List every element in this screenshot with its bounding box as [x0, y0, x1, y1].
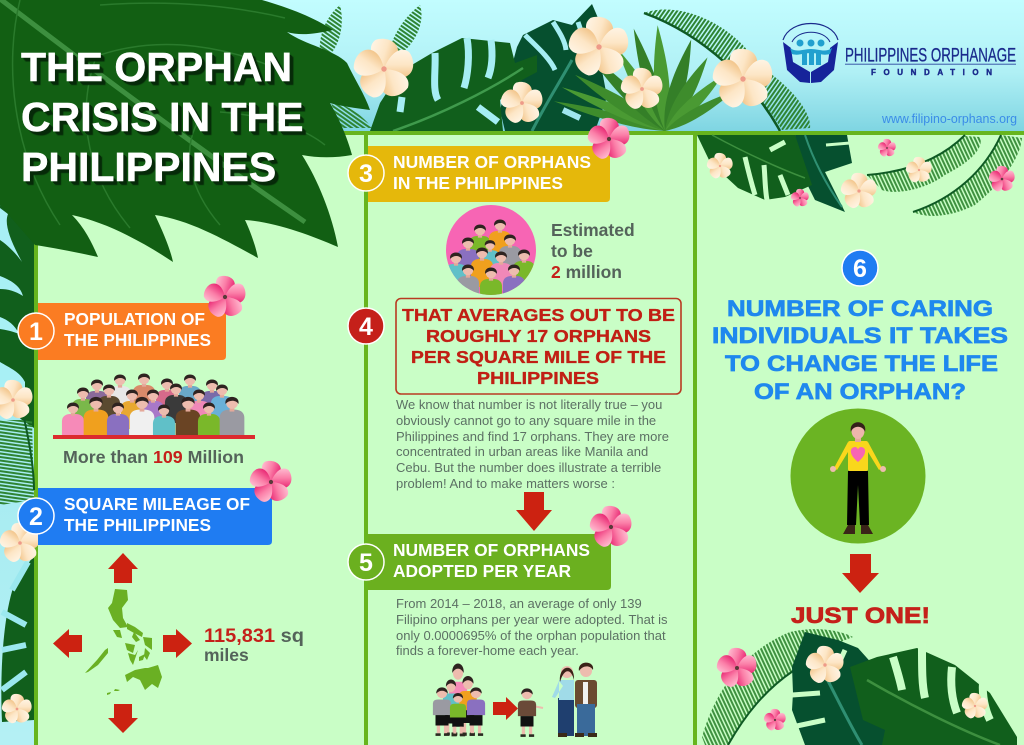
- estimate text: [551, 220, 635, 282]
- arrow left: [53, 629, 82, 658]
- fan palm: [553, 25, 737, 136]
- arrow right: [163, 629, 192, 658]
- title: THE ORPHAN: [21, 44, 292, 90]
- top right fern fronds: [867, 135, 1022, 216]
- section 4 callout: PER SQUARE MILE OF THE: [411, 347, 666, 367]
- section 4 paragraph: concentrated in urban areas like Manila and: [396, 444, 648, 459]
- section 4 paragraph: problem! And to make matters worse :: [396, 476, 615, 491]
- section 3 heading: [348, 146, 610, 202]
- section 3 heading: 3: [359, 160, 373, 188]
- section 5 heading: [348, 534, 611, 590]
- arrow to adoption: [493, 697, 518, 720]
- pink flowers: [202, 118, 1016, 732]
- section 4 callout: 4: [359, 313, 373, 341]
- estimate text: to be: [551, 241, 593, 261]
- orphans circle illustration: [446, 205, 536, 295]
- bottom right monstera, teal: [792, 632, 890, 745]
- section 4 paragraph: [396, 397, 669, 491]
- section 5 heading: 5: [359, 549, 373, 577]
- section 6 heading: OF AN ORPHAN?: [754, 379, 966, 404]
- section 3 heading: NUMBER OF ORPHANS: [393, 152, 591, 172]
- arrow down: [108, 704, 138, 733]
- section 5 heading: ADOPTED PER YEAR: [393, 561, 571, 581]
- website: www.filipino-orphans.org: [881, 112, 1017, 126]
- bottom right frond: [702, 629, 853, 745]
- section 6 heading: [712, 296, 1008, 404]
- group of orphans: [433, 663, 485, 736]
- population figure: More than 109 Million: [63, 447, 244, 467]
- section 1 heading: [18, 303, 226, 360]
- top monstera leaf, green: [370, 38, 537, 131]
- section 1 heading: POPULATION OF: [64, 309, 205, 329]
- crowd illustration: [53, 373, 255, 444]
- caring person illustration: [790, 408, 926, 544]
- adoptive parents: [552, 663, 597, 737]
- section 2 heading: [18, 488, 272, 545]
- section 6 heading: TO CHANGE THE LIFE: [725, 351, 998, 376]
- arrow up: [108, 553, 138, 583]
- section 4 callout: ROUGHLY 17 ORPHANS: [426, 326, 651, 346]
- logo: foundation: FOUNDATION: [871, 68, 992, 77]
- left strip leaves and frond: [0, 205, 34, 722]
- title leaf: [0, 0, 370, 262]
- arrow down to answer: [842, 554, 879, 593]
- section 6 number badge: 6: [853, 255, 867, 283]
- section 4 callout: THAT AVERAGES OUT TO BE: [402, 305, 675, 325]
- section 4 callout: PHILIPPINES: [477, 368, 599, 388]
- section 5 paragraph: finds a forever-home each year.: [396, 643, 579, 658]
- top monstera leaf, teal: [500, 4, 607, 131]
- fern frond top centre: [644, 10, 810, 131]
- section 3 heading: IN THE PHILIPPINES: [393, 173, 563, 193]
- logo: hands and people: [783, 24, 838, 83]
- section 6 heading: INDIVIDUALS IT TAKES: [712, 323, 1008, 348]
- section 4 callout: [348, 298, 681, 394]
- background: left strip: [0, 200, 35, 745]
- top right monstera, green: [697, 135, 812, 200]
- estimate text: Estimated: [551, 220, 635, 240]
- area figure: miles: [204, 645, 249, 665]
- logo: rule: [845, 63, 1016, 66]
- section 4 paragraph: We know that number is not literally true – you: [396, 397, 662, 412]
- section 5 heading: NUMBER OF ORPHANS: [393, 540, 590, 560]
- background: sky band: [0, 0, 1024, 131]
- section 6 heading: NUMBER OF CARING: [727, 296, 993, 321]
- map of the Philippines: [85, 589, 162, 695]
- title: CRISIS IN THE: [21, 94, 303, 140]
- estimate text: 2 million: [551, 262, 622, 282]
- section 6 number badge: [842, 250, 878, 286]
- bottom right monstera, green: [850, 648, 1017, 745]
- arrow down to section 5: [516, 492, 552, 531]
- section 5 paragraph: [396, 596, 668, 658]
- section 1 heading: 1: [29, 318, 43, 346]
- section 4 paragraph: Cebu. But the number does illustrate a terrible: [396, 460, 661, 475]
- adopted child: [518, 688, 543, 737]
- small fern fronds by title leaf: [320, 5, 422, 128]
- section 5 paragraph: Filipino orphans per year were adopted. That is: [396, 612, 668, 627]
- section 2 heading: SQUARE MILEAGE OF: [64, 494, 250, 514]
- top right monstera, teal: [795, 135, 852, 212]
- section 5 paragraph: only 0.0000695% of the orphan population that: [396, 628, 666, 643]
- area figure: [204, 626, 304, 665]
- panel borders: [34, 131, 1024, 745]
- area figure: 115,831 sq: [204, 626, 304, 647]
- section 4 paragraph: Philippines and find 17 orphans. They are more: [396, 429, 669, 444]
- title: PHILIPPINES: [21, 144, 276, 190]
- section 1 heading: THE PHILIPPINES: [64, 330, 211, 350]
- title: [21, 44, 306, 190]
- section 2 heading: THE PHILIPPINES: [64, 515, 211, 535]
- section 2 heading: 2: [29, 503, 43, 531]
- section 4 paragraph: obviously cannot go to any square mile in the: [396, 413, 656, 428]
- section 5 paragraph: From 2014 – 2018, an average of only 139: [396, 596, 642, 611]
- answer text: JUST ONE!: [791, 603, 930, 628]
